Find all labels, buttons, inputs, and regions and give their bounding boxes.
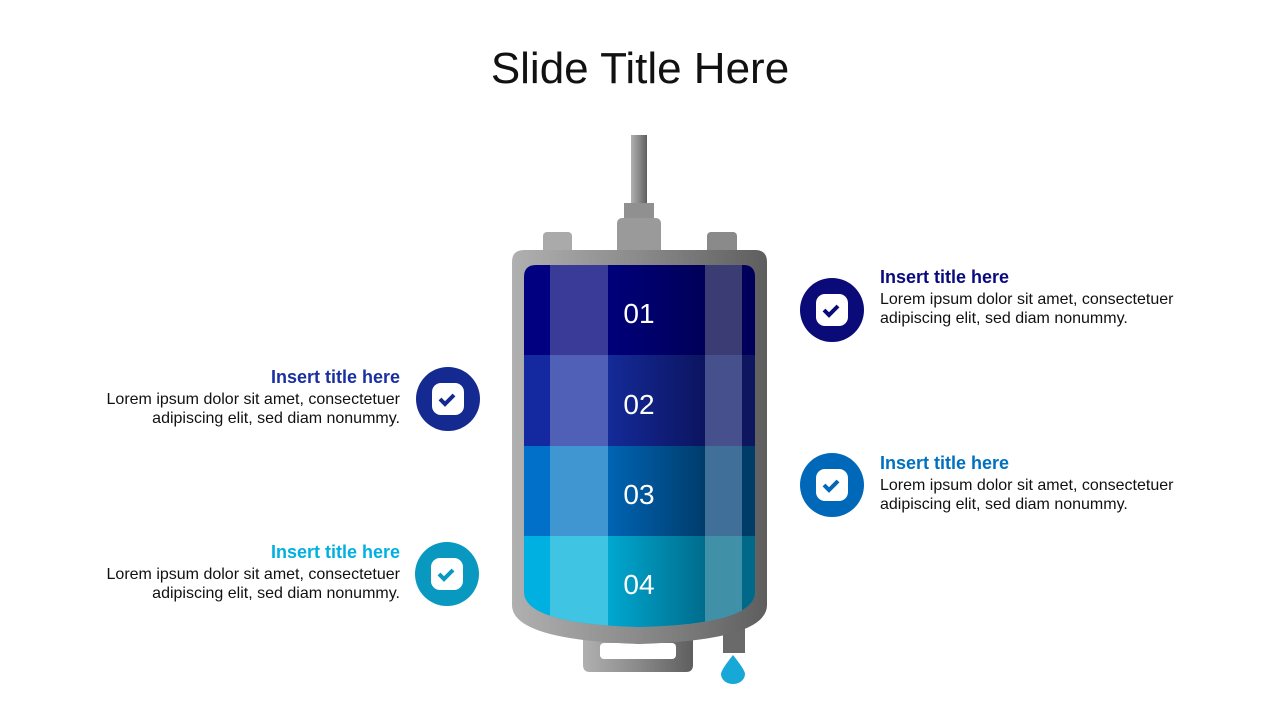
text left 2: Insert title here [271,542,400,562]
text right 1: adipiscing elit, sed diam nonummy. [880,310,1128,327]
text right 1: Lorem ipsum dolor sit amet, consectetuer [880,291,1173,308]
text right 2: Insert title here [880,453,1009,473]
text left 1: adipiscing elit, sed diam nonummy. [152,410,400,427]
title: Slide Title Here [491,44,789,93]
numbers: 02 [623,389,655,420]
text right 2 [880,453,1174,513]
fluid segments [524,265,755,631]
numbers: 03 [623,479,655,510]
text right 2: adipiscing elit, sed diam nonummy. [880,496,1128,513]
text left 2: adipiscing elit, sed diam nonummy. [152,585,400,602]
text right 1 [880,267,1174,327]
text right 1: Insert title here [880,267,1009,287]
numbers: 01 [623,298,655,329]
numbers [623,298,655,600]
numbers: 04 [623,569,655,600]
text left 1: Lorem ipsum dolor sit amet, consectetuer [107,391,400,408]
text left 1 [107,367,400,427]
bag body [512,218,767,672]
text left 2: Lorem ipsum dolor sit amet, consectetuer [107,566,400,583]
icons [415,278,864,606]
text left 1: Insert title here [271,367,400,387]
drop [721,655,745,684]
text left 2 [107,542,400,602]
tube [624,135,654,221]
text right 2: Lorem ipsum dolor sit amet, consectetuer [880,477,1173,494]
iv bag graphic [415,135,864,684]
